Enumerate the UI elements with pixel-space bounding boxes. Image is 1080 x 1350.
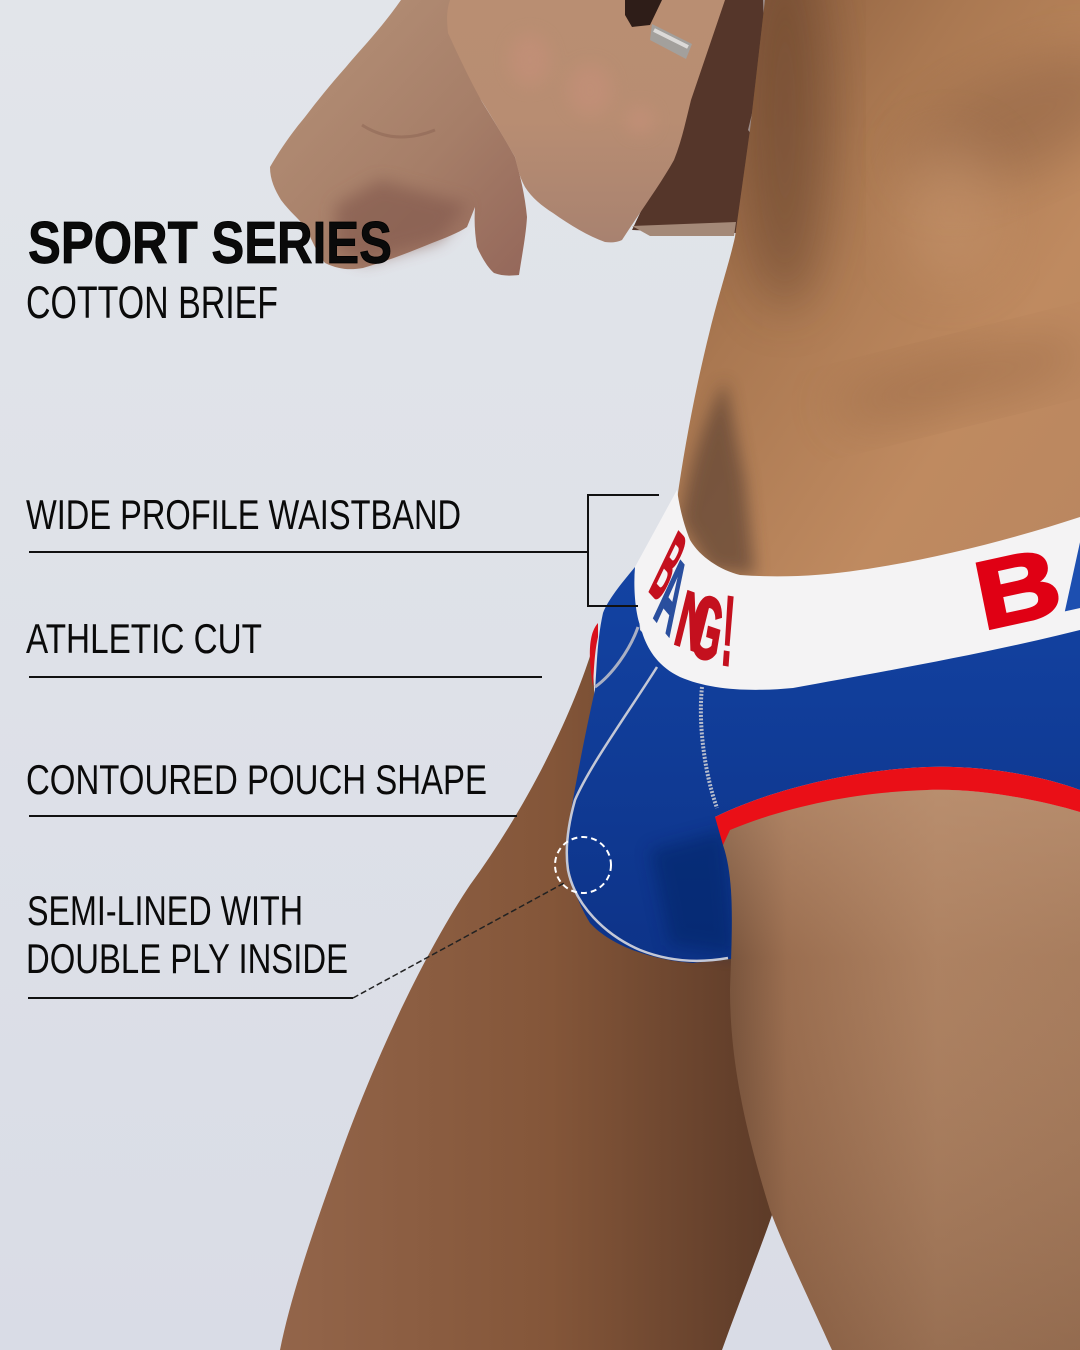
- torso shading: abdominal and hair: [680, 0, 1080, 575]
- callout: semi-lined: [26, 837, 611, 998]
- waistband logo: side: [639, 511, 738, 687]
- waistband logo: side: G: [684, 574, 730, 682]
- front hand: [447, 0, 725, 242]
- heading: [26, 210, 392, 328]
- pouch shading: [650, 830, 735, 955]
- brief body: [567, 567, 1080, 963]
- pouch stitching: [567, 667, 728, 961]
- waistband logo: front: B: [966, 527, 1069, 650]
- callout: pouch shape: CONTOURED POUCH SHAPE: [26, 756, 487, 803]
- knuckles: [510, 34, 654, 134]
- waistband logo: side: B: [639, 511, 698, 622]
- white waistband: [634, 490, 1080, 690]
- torso: [677, 0, 1080, 600]
- back leg: [280, 650, 772, 1350]
- callout: semi-lined: SEMI-LINED WITH: [27, 887, 303, 934]
- gap between fingers: [625, 0, 662, 27]
- callout: waistband: [26, 491, 659, 606]
- red trim on leg opening: [715, 767, 1080, 845]
- waistband logo: side: N: [668, 575, 717, 670]
- callout: waistband: WIDE PROFILE WAISTBAND: [26, 491, 461, 538]
- callout: athletic cut: ATHLETIC CUT: [26, 615, 262, 662]
- front leg: [723, 790, 1080, 1350]
- callout: semi-lined: DOUBLE PLY INSIDE: [26, 935, 348, 982]
- shadow behind hand: [632, 0, 770, 233]
- subheading: COTTON BRIEF: [26, 277, 278, 328]
- heading: SPORT SERIES: [28, 210, 392, 276]
- ring: [650, 24, 692, 59]
- figure: model wearing brief: [270, 0, 1080, 1350]
- rear hand: [270, 0, 527, 276]
- waistband logo: side: A: [646, 533, 697, 657]
- waistband logo: side: !: [718, 575, 738, 687]
